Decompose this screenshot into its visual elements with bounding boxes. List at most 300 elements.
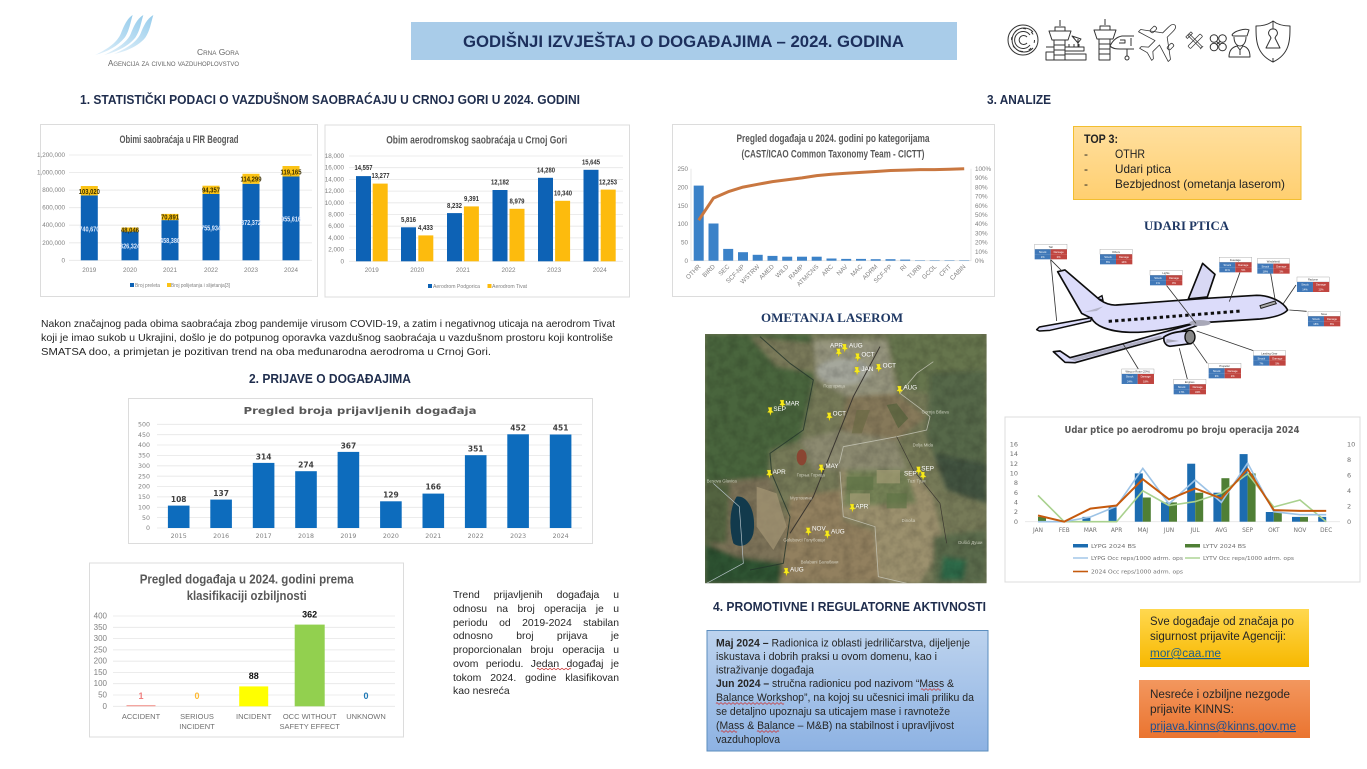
pin markers with month labels: AUG [903,384,917,391]
callout: tail: Damage [1054,250,1064,254]
chart: airport traffic in Montenegro: Obim aerodromskog saobraćaja u Crnoj Gori [386,134,567,146]
chart: bird strikes per airport: JUL [1190,528,1201,534]
chart: airport traffic in Montenegro [325,125,630,297]
chart: airport traffic in Montenegro: 12,253 [599,178,617,186]
heading: section 3: 3. ANALIZE [987,93,1051,107]
chart: airport traffic in Montenegro: 14,557 [354,163,372,172]
chart: events by CICTT category (Pareto): CABIN [949,263,968,282]
chart: FIR Beograd traffic: Broj polijetanja i slijetanja[3] [171,283,230,289]
callout: engines: Engines [1185,380,1195,384]
chart: reported events per year: 50 [142,515,150,522]
callout: lights: Lights [1162,271,1170,275]
callout: fuselage: 11% [1225,268,1231,272]
chart: FIR Beograd traffic: 955,616 [281,214,301,224]
text block: traffic commentary [41,318,615,358]
chart: airport traffic in Montenegro: 13,277 [372,171,390,180]
chart: events by severity classification: INCIDENT [179,722,215,731]
callout: windshield: Struck [1262,264,1270,268]
chart: FIR Beograd traffic: 48,046 [121,226,139,234]
far wing [1188,263,1215,299]
pin markers with month labels: JAN [861,366,874,373]
chart: FIR Beograd traffic: 2019 [82,267,97,274]
chart: FIR Beograd traffic: 2023 [244,267,258,274]
farmland patches [757,403,908,550]
chart: events by severity classification: OCC WITHOUT [283,712,337,721]
chart: reported events per year: 250 [138,473,150,480]
callout: others: Damage [1119,255,1130,259]
chart: airport traffic in Montenegro: 12,000 [325,188,344,195]
chart: airport traffic in Montenegro: 8,000 [328,212,344,218]
chart: events by severity classification: 350 [94,623,108,632]
callout: tail: Struck [1039,250,1047,254]
map: laser interference locations: Dinoša [902,518,916,523]
chart: reported events per year [128,398,592,544]
pin markers with month labels: NOV [812,526,826,533]
chart: events by severity classification: 88 [249,671,259,681]
text block: traffic commentary: koji je imao sukob u Ukrajini, došlo je do potpunog oporavka vazdušnog saobraćaja u vazdušnom prostoru koji kontroliše [41,332,613,344]
pin markers with month labels: MAR [785,400,800,407]
chart: reported events per year: 2022 [468,533,484,540]
callout: others: Others [1112,250,1121,254]
chart: events by severity classification: INCIDENT [236,712,272,721]
chart: airport traffic in Montenegro: 0 [340,258,344,265]
chart: bird strikes per airport: JUN [1163,528,1174,534]
chart: events by severity classification: 250 [94,645,108,654]
chart: airport traffic in Montenegro: 10,000 [325,200,344,207]
callout: engines [1174,379,1206,394]
chart: events by severity classification: 362 [302,610,317,620]
pin markers with month labels: AUG [849,343,863,350]
icon: control tower and aircraft nose [1094,19,1134,60]
chart: reported events per year: 2021 [425,533,441,540]
chart: bird strikes per airport: 4 [1347,487,1351,495]
callout: fuselage: Fuselage [1230,258,1241,262]
pin markers with month labels: MAY [825,463,839,470]
map: laser interference locations: Подгорица [823,383,845,388]
text box: promotional and regulatory activities: Maj 2024 – Radionica iz oblasti jedriličarstva, dijeljenje [716,638,970,650]
callout: radome: Struck [1301,283,1309,287]
chart: events by severity classification: ACCIDENT [122,712,161,721]
pin markers with month labels: SEP [921,466,934,473]
chart: bird strikes per airport: NOV [1294,528,1306,534]
callout: lights: Struck [1154,276,1162,280]
icon: large aircraft [1131,10,1190,69]
chart: bird strikes per airport: 0 [1014,518,1018,526]
lake [730,497,754,546]
icon: pilot [1229,29,1250,57]
chart: FIR Beograd traffic: 119,165 [280,168,302,176]
chart: FIR Beograd traffic: 458,380 [160,236,180,245]
chart: events by CICTT category (Pareto): SCF-PP [873,263,894,285]
chart: events by severity classification: 100 [94,679,108,688]
callout: landing gear: Landing Gear [1261,351,1277,355]
chart: reported events per year: Pregled broja prijavljenih događaja [244,406,476,417]
icon: drone [1210,35,1226,51]
text block: reporting trend: tokom 2024. godine klasifikovan [453,672,619,684]
callout: fuselage: 5% [1241,268,1246,272]
pin markers with month labels: OCT [833,410,846,417]
callout: landing gear: Damage [1272,356,1283,360]
callout: tail [1035,244,1067,259]
chart: events by CICTT category (Pareto): 50% [975,212,988,219]
chart: bird strikes per airport: MAR [1084,528,1097,534]
chart: events by CICTT category (Pareto): 50 [681,240,688,247]
callout: report events to the Agency: mor@caa.me [1150,648,1221,660]
callout: report accidents to KINNS [1139,680,1310,738]
callout: report accidents to KINNS: prijavite KINNS: [1150,704,1234,716]
title banner: GODIŠNJI IZVJEŠTAJ O DOGAĐAJIMA – 2024. GODINA [463,32,904,51]
chart: events by severity classification: 200 [94,657,108,666]
chart: events by CICTT category (Pareto): 150 [677,203,688,210]
chart: airport traffic in Montenegro: 2021 [456,267,470,274]
chart: bird strikes per airport: 8 [1014,479,1018,487]
chart: FIR Beograd traffic: Obimi saobraćaja u FIR Beograd [120,134,238,146]
chart: airport traffic in Montenegro: 2019 [365,267,379,274]
heading: laser interference: OMETANJA LASEROM [761,310,903,325]
callout: nose: 18% [1313,322,1319,326]
callout: wing or rotor: Wing or Rotor (20%) [1126,370,1150,374]
chart: events by CICTT category (Pareto): 60% [975,203,988,210]
icon row: aviation [1008,10,1290,69]
chart: events by CICTT category (Pareto): NAV [836,263,850,277]
text block: reporting trend: odnosu na broj operacija je u [453,604,619,615]
chart: bird strikes per airport: 2024 Occ reps/1000 adrm. ops [1091,570,1183,576]
chart: FIR Beograd traffic: 1,200,000 [37,152,65,159]
chart: airport traffic in Montenegro: 8,232 [447,201,462,210]
chart: bird strikes per airport: Udar ptice po aerodromu po broju operacija 2024 [1064,425,1300,436]
callout: others: Struck [1104,255,1112,259]
chart: events by CICTT category (Pareto): Pregled događaja u 2024. godini po kategorijama [736,133,930,145]
callout: wing or rotor: Struck [1126,375,1134,379]
chart: FIR Beograd traffic [37,124,318,296]
chart: airport traffic in Montenegro: 14,000 [325,176,344,183]
chart: bird strikes per airport: LYPG Occ reps/1000 adrm. ops [1091,556,1183,562]
callout: windshield: 3% [1279,269,1284,273]
chart: events by severity classification: 300 [94,634,108,643]
chart: reported events per year: 300 [138,463,150,470]
callout: others: 8% [1106,260,1111,264]
chart: FIR Beograd traffic: 400,000 [42,222,65,229]
chart: events by CICTT category (Pareto): MAC [850,263,865,278]
chart: reported events per year: 2024 [553,533,569,540]
chart: bird strikes per airport: 8 [1347,456,1351,464]
chart: events by CICTT category (Pareto): ADRM [861,263,879,282]
callout: nose: Struck [1312,317,1320,321]
callout: nose: 8% [1330,322,1335,326]
text block: reporting trend: kao nesreća [453,686,510,697]
callout: propeller [1209,363,1241,378]
windows [1109,311,1242,321]
chart: bird strikes per airport: LYTV 2024 BS [1203,544,1246,550]
callout: fuselage [1219,257,1252,272]
text block: reporting trend: Trend prijavljenih događaja u [453,590,619,601]
chart: bird strikes per airport: APR [1111,528,1122,534]
chart: reported events per year: 351 [468,444,484,454]
chart: events by CICTT category (Pareto): 200 [677,184,688,191]
chart: FIR Beograd traffic: 2024 [284,267,298,274]
chart: reported events per year: 2023 [510,533,526,540]
chart: airport traffic in Montenegro: 2022 [501,267,516,274]
chart: events by CICTT category (Pareto): GCOL [921,263,939,281]
chart: FIR Beograd traffic: Broj preleta [135,283,161,289]
logo: Agencija za civilno vazduhoplovstvo: Crna Gora [197,48,239,57]
chart: events by CICTT category (Pareto): 250 [677,166,688,173]
chart: FIR Beograd traffic: 103,020 [79,187,100,196]
callout: report events to the Agency: Sve događaje od značaja po [1150,616,1294,628]
callout: top 3 categories: - [1084,177,1088,191]
callout: tail: Tail [1049,245,1053,249]
text block: reporting trend: proporcionalan broju operacija u [453,645,619,656]
callout: wing or rotor: 24% [1127,380,1133,384]
chart: bird strikes per airport: 10 [1010,470,1018,478]
callout: radome: 14% [1302,288,1308,292]
icon: control tower and terminal [1046,20,1086,60]
callout: top 3 categories: OTHR [1115,147,1145,161]
chart: airport traffic in Montenegro: 18,000 [325,153,344,160]
chart: events by CICTT category (Pareto): BIRD [701,263,717,279]
callout: lights [1150,270,1182,285]
heading: bird strikes: UDARI PTICA [1144,218,1230,233]
chart: bird strikes per airport: LYPG 2024 BS [1091,544,1137,550]
text box: promotional and regulatory activities: vazduhoplova [716,734,781,746]
chart: bird strikes per airport: 6 [1347,472,1351,480]
chart: events by severity classification: 400 [94,612,108,620]
chart: events by severity classification: 0 [363,691,369,701]
chart: FIR Beograd traffic: 740,670 [79,224,99,234]
callout: top 3 categories: TOP 3: [1084,132,1118,146]
icon: small propeller plane [1182,28,1208,54]
chart: bird strikes per airport: 2 [1014,508,1018,516]
pin markers with month labels: OCT [883,363,896,370]
map: laser interference locations: Dolja Mida [913,443,934,448]
text box: promotional and regulatory activities: Jun 2024 – stručna radionicu pod nazivom “Mass & [716,678,955,690]
callout: wing or rotor: 18% [1143,380,1149,384]
chart: events by CICTT category (Pareto): 0% [975,258,985,265]
callout: radome: Radome [1308,278,1319,282]
pin markers with month labels [766,343,934,576]
text box: promotional and regulatory activities: se detaljno upoznaju sa uticajem mase i ravnoteže [716,706,950,718]
chart: events by severity classification: 1 [138,691,144,701]
chart: reported events per year: 500 [138,422,150,428]
chart: events by severity classification: 150 [94,668,108,677]
icon: radar [1008,25,1038,55]
chart: reported events per year: 400 [138,442,150,449]
pin markers with month labels: APR [855,503,869,510]
chart: events by CICTT category (Pareto): RAMP [788,263,805,281]
chart: events by severity classification: 0 [194,691,200,701]
chart: reported events per year: 2020 [383,533,399,540]
chart: FIR Beograd traffic: 2022 [204,267,218,274]
callout: report accidents to KINNS: Nesreće i ozbiljne nezgode [1150,689,1290,701]
callout: windshield: 18% [1263,269,1269,273]
chart: events by CICTT category (Pareto): OTHR [685,263,703,281]
chart: airport traffic in Montenegro: 2020 [410,267,425,274]
chart: events by severity classification: 50 [98,690,108,700]
text block: traffic commentary: SMATSA doo, a primjetan je pozitivan trend na oba međunarodna aerodroma u Crnoj Gori. [41,346,491,358]
chart: bird strikes per airport: 4 [1014,498,1018,506]
chart: airport traffic in Montenegro: 16,000 [325,165,344,172]
chart: bird strikes per airport: 6 [1014,489,1018,497]
chart: airport traffic in Montenegro: 4,433 [418,223,433,232]
callout: radome: 11% [1318,288,1324,292]
callout: fuselage: Damage [1238,263,1249,267]
callout: report events to the Agency [1140,609,1309,667]
pin markers with month labels: APR [773,469,786,476]
callout: top 3 categories: Udari ptica [1115,162,1171,176]
callout: landing gear [1253,351,1286,366]
chart: reported events per year: 2017 [256,533,272,540]
stabilizer [1037,318,1092,331]
chart: FIR Beograd traffic: 94,357 [202,186,220,194]
chart: events by CICTT category (Pareto): 20% [975,240,988,247]
heading: section 4: 4. PROMOTIVNE I REGULATORNE AKTIVNOSTI [713,600,986,614]
callout: propeller: 3% [1215,374,1219,378]
chart: FIR Beograd traffic: 200,000 [42,240,65,247]
callout: radome [1297,277,1329,292]
pin markers with month labels: SEP [904,470,917,477]
chart: reported events per year: 451 [553,424,568,432]
callout: landing gear: 5% [1275,361,1280,365]
chart: bird strikes per airport: DEC [1320,528,1332,534]
callout: engines: 17% [1179,390,1185,394]
chart: bird strikes per airport: 12 [1010,460,1018,468]
chart: FIR Beograd traffic: 70,891 [161,212,179,222]
callout: fuselage: Struck [1224,263,1232,267]
chart: reported events per year: 450 [138,432,150,439]
chart: events by CICTT category (Pareto): 40% [975,221,988,228]
callout: lights: 0% [1172,281,1177,285]
chart: bird strikes per airport: AVG [1215,528,1228,534]
text box: promotional and regulatory activities: Balance Workshop”, na kojoj su učesnici imali priliku da [716,692,975,704]
chart: events by CICTT category (Pareto): CFIT [938,263,953,278]
chart: reported events per year: 200 [138,484,150,491]
chart: airport traffic in Montenegro: 14,280 [537,166,555,174]
chart: reported events per year: 2015 [171,533,187,540]
callout: engines: Struck [1178,385,1186,389]
chart: events by CICTT category (Pareto): 70% [975,194,988,201]
near wing [1053,323,1197,363]
engine [1164,331,1191,346]
diagram: aircraft bird-strike locations [1035,244,1340,394]
chart: events by CICTT category (Pareto): AMED [758,263,776,281]
chart: bird strikes per airport: MAJ [1137,528,1148,534]
logo: Agencija za civilno vazduhoplovstvo: Agencija za civilno vazduhoplovstvo [108,59,239,68]
chart: bird strikes per airport: SEP [1242,528,1254,534]
logo: Agencija za civilno vazduhoplovstvo [95,15,239,68]
chart: reported events per year: 367 [341,442,356,450]
chart: events by CICTT category (Pareto): WSTRW [739,263,761,286]
map: laser interference locations: Balabani Балабани [801,559,839,564]
callout: propeller: Struck [1213,369,1221,373]
chart: airport traffic in Montenegro: 15,645 [582,158,600,166]
chart: events by CICTT category (Pareto): TURB [906,263,923,281]
chart: FIR Beograd traffic: 800,000 [42,187,65,194]
callout: wing or rotor [1122,369,1154,384]
chart: bird strikes per airport: 16 [1010,440,1018,448]
callout: engines: 34% [1195,390,1201,394]
callout: report events to the Agency: sigurnost prijavite Agenciji: [1150,631,1286,643]
pin markers with month labels: AUG [790,567,804,574]
callout: top 3 categories: Bezbjednost (ometanja laserom) [1115,177,1285,191]
callout leader lines [1051,260,1307,379]
chart: FIR Beograd traffic: 1,000,000 [37,170,65,177]
map: laser interference locations: Tuzi Тузи [907,478,926,483]
chart: FIR Beograd traffic: 114,299 [240,174,262,184]
chart: events by CICTT category (Pareto): (CAST/ICAO Common Taxonomy Team - CICTT) [742,148,925,160]
chart: airport traffic in Montenegro: 4,000 [328,235,344,242]
heading: section 2: 2. PRIJAVE O DOGAĐAJIMA [249,372,411,386]
chart: events by CICTT category (Pareto) [672,124,994,296]
callout: windshield: Damage [1276,264,1287,268]
text block: reporting trend: periodu od 2019-2024 stabilan [453,618,619,628]
cockpit [1260,301,1276,308]
callout: top 3 categories: - [1084,147,1088,161]
callout: tail: 1% [1041,255,1045,259]
callout: others: 14% [1121,260,1127,264]
chart: FIR Beograd traffic: 2020 [123,267,137,274]
chart: events by CICTT category (Pareto): 100% [975,166,992,173]
callout: lights: Damage [1169,276,1180,280]
callout: nose: Damage [1327,317,1338,321]
chart: events by severity classification: UNKNOWN [346,712,386,721]
chart: events by CICTT category (Pareto): ARC [821,263,835,278]
callout: propeller: 1% [1231,374,1235,378]
callout: top 3 categories: - [1084,162,1088,176]
chart: bird strikes per airport: JAN [1032,528,1043,534]
chart: reported events per year: 314 [256,452,271,462]
text box: promotional and regulatory activities: iskustava i dobrih praksi u ovom domenu, kao i [716,651,937,663]
chart: airport traffic in Montenegro: 6,000 [328,223,344,230]
chart: airport traffic in Montenegro: 2023 [547,267,562,274]
chart: events by CICTT category (Pareto): RI [899,263,909,273]
chart: reported events per year: 0 [146,525,150,532]
map: laser interference locations: Муртовина [790,495,813,500]
chart: airport traffic in Montenegro: Aerodrom Tivat [492,284,527,290]
chart: reported events per year: 2019 [340,533,356,540]
heading: section 1: 1. STATISTIČKI PODACI O VAZDUŠNOM SAOBRAĆAJU U CRNOJ GORI U 2024. GODINI [80,92,580,107]
spelling underline decoration: događaj [537,668,571,670]
chart: bird strikes per airport [1005,417,1360,582]
chart: events by CICTT category (Pareto): WILD [774,263,791,280]
chart: reported events per year: 452 [510,424,526,432]
callout: windshield: Windshield [1267,259,1280,263]
chart: FIR Beograd traffic: 600,000 [42,205,65,212]
fuselage and tail [1058,270,1288,332]
text block: reporting trend [453,590,619,697]
chart: FIR Beograd traffic: 2021 [163,267,177,274]
chart: events by CICTT category (Pareto): ATM/CNS [796,263,820,288]
callout: propeller: Propeller [1219,364,1230,368]
map: laser interference locations: Besova Glavica [707,479,737,484]
pin markers with month labels: OCT [861,352,875,359]
chart: events by CICTT category (Pareto): SCF-NP [725,263,746,285]
map: laser interference locations [705,334,987,583]
map: laser interference locations: Gornja Biševa [922,409,949,414]
chart: reported events per year: 137 [213,489,229,498]
chart: bird strikes per airport: 2 [1347,502,1351,510]
callout: propeller: Damage [1228,369,1238,373]
text box: promotional and regulatory activities: istraživanje događaja [716,664,815,676]
pin markers with month labels: SEP [773,406,786,413]
chart: airport traffic in Montenegro: 2024 [593,267,607,274]
text box: promotional and regulatory activities [707,630,988,751]
chart: events by CICTT category (Pareto): 100 [677,221,688,228]
chart: airport traffic in Montenegro: 2,000 [328,247,344,254]
title banner [411,22,957,60]
chart: events by CICTT category (Pareto): SEC [717,263,732,278]
chart: events by severity classification: Pregled događaja u 2024. godini prema [140,572,355,586]
chart: FIR Beograd traffic: 755,934 [201,224,222,232]
